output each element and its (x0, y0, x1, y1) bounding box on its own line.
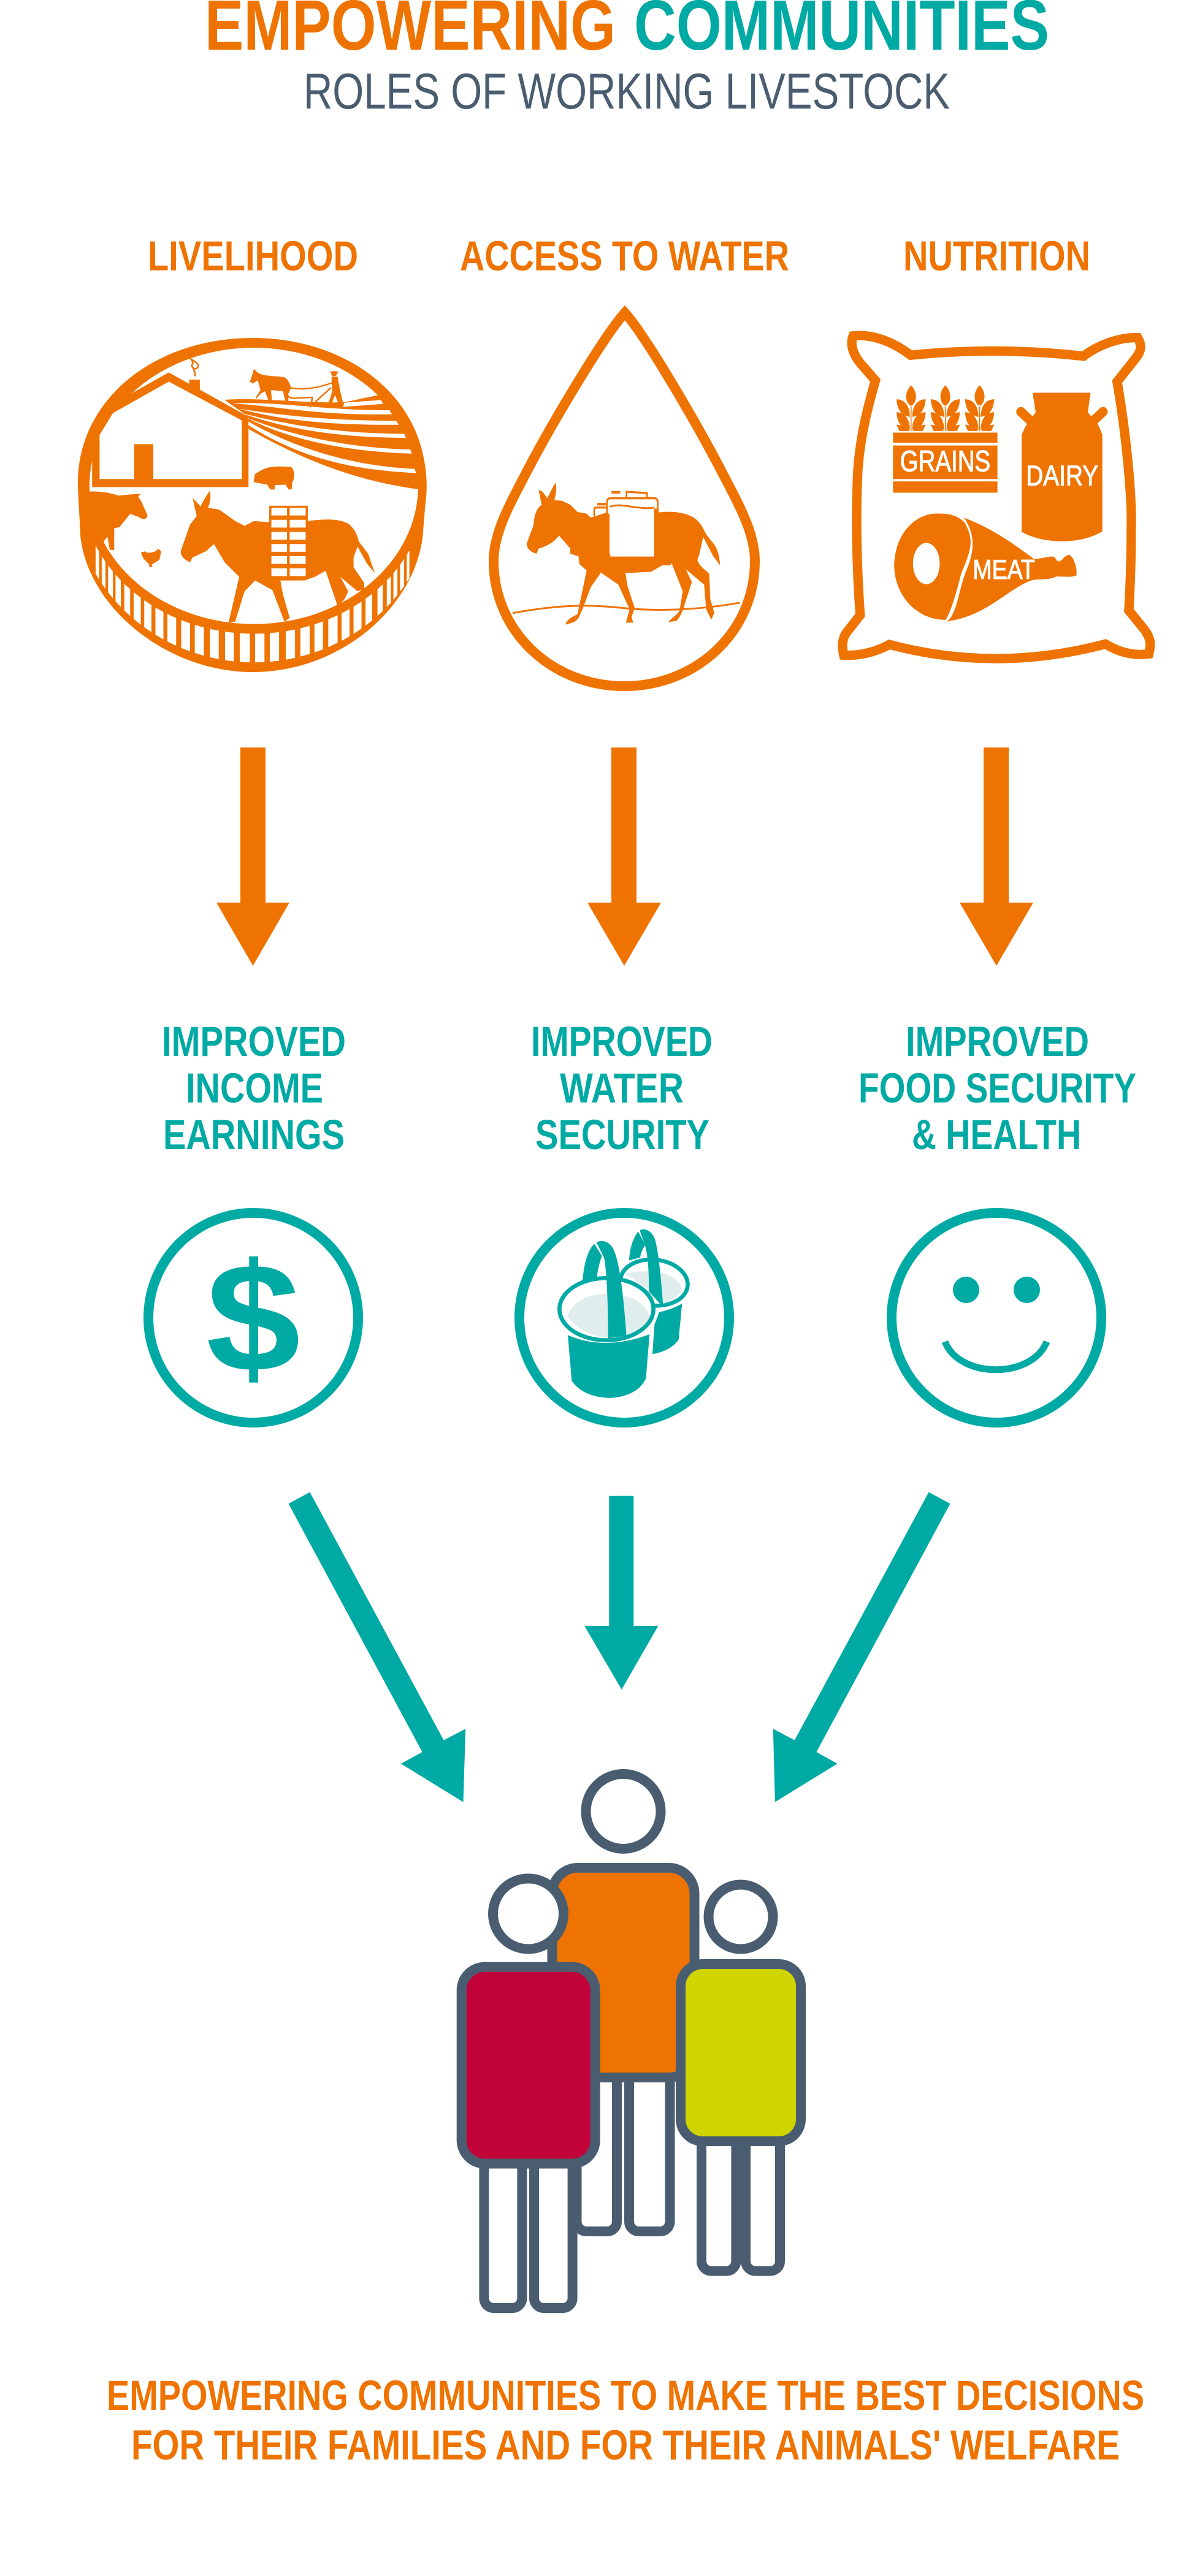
heading: access to water: ACCESS TO WATER (460, 232, 789, 280)
text: improved food security and health (858, 1018, 1136, 1158)
closing statement (107, 2372, 1144, 2469)
text: improved water security (531, 1018, 713, 1158)
text: improved income earnings: IMPROVED (162, 1018, 346, 1065)
arrow: nutrition down (960, 747, 1033, 966)
child figure, yellow-green (681, 1885, 801, 2271)
meat ham (894, 514, 1077, 622)
sack outline (843, 335, 1150, 659)
subtitle: ROLES OF WORKING LIVESTOCK (304, 63, 950, 120)
heading: nutrition: NUTRITION (903, 232, 1090, 280)
text: improved water security: WATER (560, 1064, 684, 1112)
text: improved income earnings: EARNINGS (163, 1111, 345, 1158)
text: improved water security: IMPROVED (531, 1018, 713, 1065)
meat ham: MEAT (973, 555, 1035, 585)
child figure, crimson (462, 1879, 595, 2308)
arrow: income to community (288, 1492, 465, 1802)
arrow: water down (587, 747, 661, 966)
text: improved food security and health: & HEALTH (912, 1111, 1081, 1158)
text: improved water security: SECURITY (535, 1111, 709, 1158)
heading: livelihood: LIVELIHOOD (148, 232, 358, 280)
arrow: food security to community (773, 1492, 950, 1802)
adult figure, orange (552, 1774, 694, 2231)
icon: smiley in circle (892, 1213, 1101, 1423)
icon: donkey carrying water container (513, 483, 740, 625)
grains crate with wheat (893, 385, 998, 492)
family of three figures (462, 1774, 801, 2308)
title (205, 0, 1049, 65)
text: improved income earnings: INCOME (186, 1064, 323, 1112)
text: improved income earnings (162, 1018, 346, 1158)
icon: water drop outline (494, 313, 755, 686)
arrow: livelihood down (216, 747, 289, 966)
arrow: water to community (584, 1496, 658, 1689)
dairy milk churn: DAIRY (1026, 460, 1098, 492)
text: improved food security and health: IMPROVED (906, 1018, 1089, 1065)
grains crate with wheat: GRAINS (900, 446, 990, 478)
dairy milk churn (1021, 392, 1103, 541)
icon: livelihood coin with farm scene (78, 338, 427, 682)
icon: dollar in circle: $ (206, 1232, 300, 1404)
icon: dollar in circle (148, 1213, 358, 1423)
icon: water buckets in circle (519, 1213, 729, 1423)
icon: nutrition sack (843, 335, 1150, 659)
